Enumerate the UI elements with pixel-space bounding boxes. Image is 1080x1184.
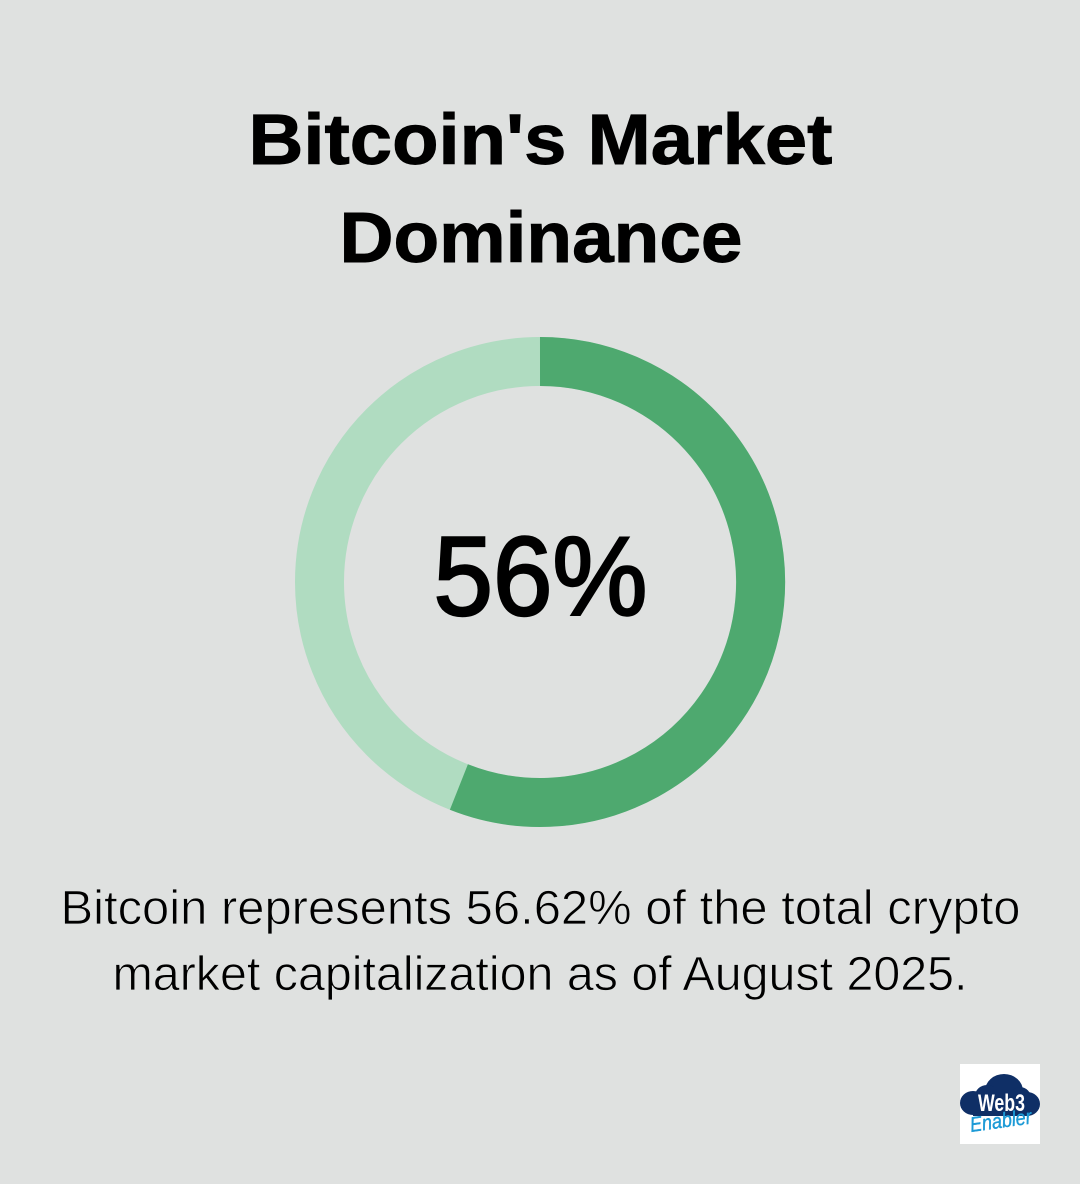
title: Bitcoin's Market xyxy=(248,101,832,180)
logo word: Web3: Web3 xyxy=(978,1090,1025,1117)
logo background xyxy=(960,1064,1040,1144)
logo word: Enabler: Enabler xyxy=(968,1105,1034,1137)
donut chart xyxy=(320,362,761,802)
Bitcoin share arc xyxy=(459,362,761,802)
title: Dominance xyxy=(340,199,742,278)
remaining share ring xyxy=(320,362,760,802)
description text: Bitcoin represents 56.62% of the total crypto xyxy=(60,882,1020,935)
title xyxy=(248,101,832,278)
icon: cloud xyxy=(960,1074,1040,1116)
logo: Web3 Enabler xyxy=(960,1064,1040,1144)
description text: market capitalization as of August 2025. xyxy=(112,948,968,1001)
description text xyxy=(60,882,1020,1001)
center value: 56% xyxy=(434,514,648,639)
